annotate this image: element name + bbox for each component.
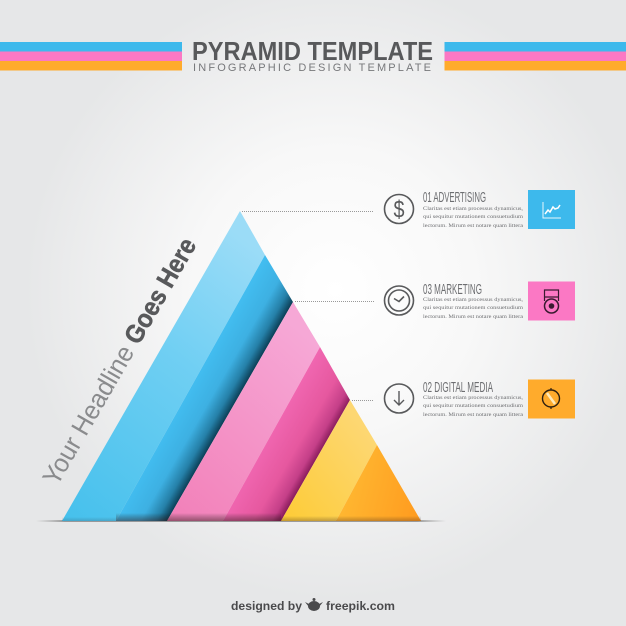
icon tile: compass	[528, 380, 575, 418]
dotted connectors	[242, 210, 374, 212]
icon: dollar	[384, 194, 414, 224]
icon: dollar: $	[394, 196, 404, 224]
icon: arrow down	[384, 384, 414, 413]
item: 02 digital media	[384, 379, 575, 418]
body text: qui sequitur mutationem consuetudium	[423, 403, 524, 409]
headline along pyramid edge: Your Headline	[36, 340, 140, 490]
body text	[423, 297, 524, 320]
body text	[423, 206, 524, 229]
item: 03 marketing	[384, 281, 575, 320]
headline along pyramid edge: Goes Here	[118, 233, 202, 349]
heading: digital media: 02 DIGITAL MEDIA	[423, 379, 493, 396]
icon: freepik logo	[305, 598, 323, 611]
pyramid	[62, 211, 421, 521]
body text: lectorum. Mirum est notare quam littera	[423, 314, 524, 320]
body text	[423, 395, 524, 418]
body text: lectorum. Mirum est notare quam littera	[423, 412, 524, 418]
icon: clock	[384, 286, 414, 315]
body text: Claritas est etiam processus dynamicus,	[423, 206, 524, 212]
body text: Claritas est etiam processus dynamicus,	[423, 395, 524, 401]
item: 01 advertising	[384, 189, 575, 229]
footer credit	[231, 598, 395, 613]
heading: marketing: 03 MARKETING	[423, 281, 482, 298]
yellow segment	[281, 400, 421, 521]
icon tile: badge	[528, 282, 575, 320]
subtitle: INFOGRAPHIC DESIGN TEMPLATE	[193, 62, 431, 74]
body text: qui sequitur mutationem consuetudium	[423, 214, 524, 220]
right header stripes	[444, 42, 626, 70]
body text: lectorum. Mirum est notare quam littera	[423, 223, 524, 229]
left header stripes	[0, 42, 182, 70]
headline along pyramid edge	[36, 233, 202, 490]
body text: Claritas est etiam processus dynamicus,	[423, 297, 524, 303]
pink segment	[167, 302, 350, 521]
floor shadow	[36, 520, 446, 522]
footer credit: designed by	[231, 601, 303, 613]
footer credit: freepik.com	[326, 601, 395, 613]
heading: advertising: 01 ADVERTISING	[423, 189, 486, 206]
icon tile: chart	[528, 190, 575, 229]
body text: qui sequitur mutationem consuetudium	[423, 305, 524, 311]
title: PYRAMID TEMPLATE	[192, 36, 433, 66]
blue segment	[62, 211, 293, 521]
